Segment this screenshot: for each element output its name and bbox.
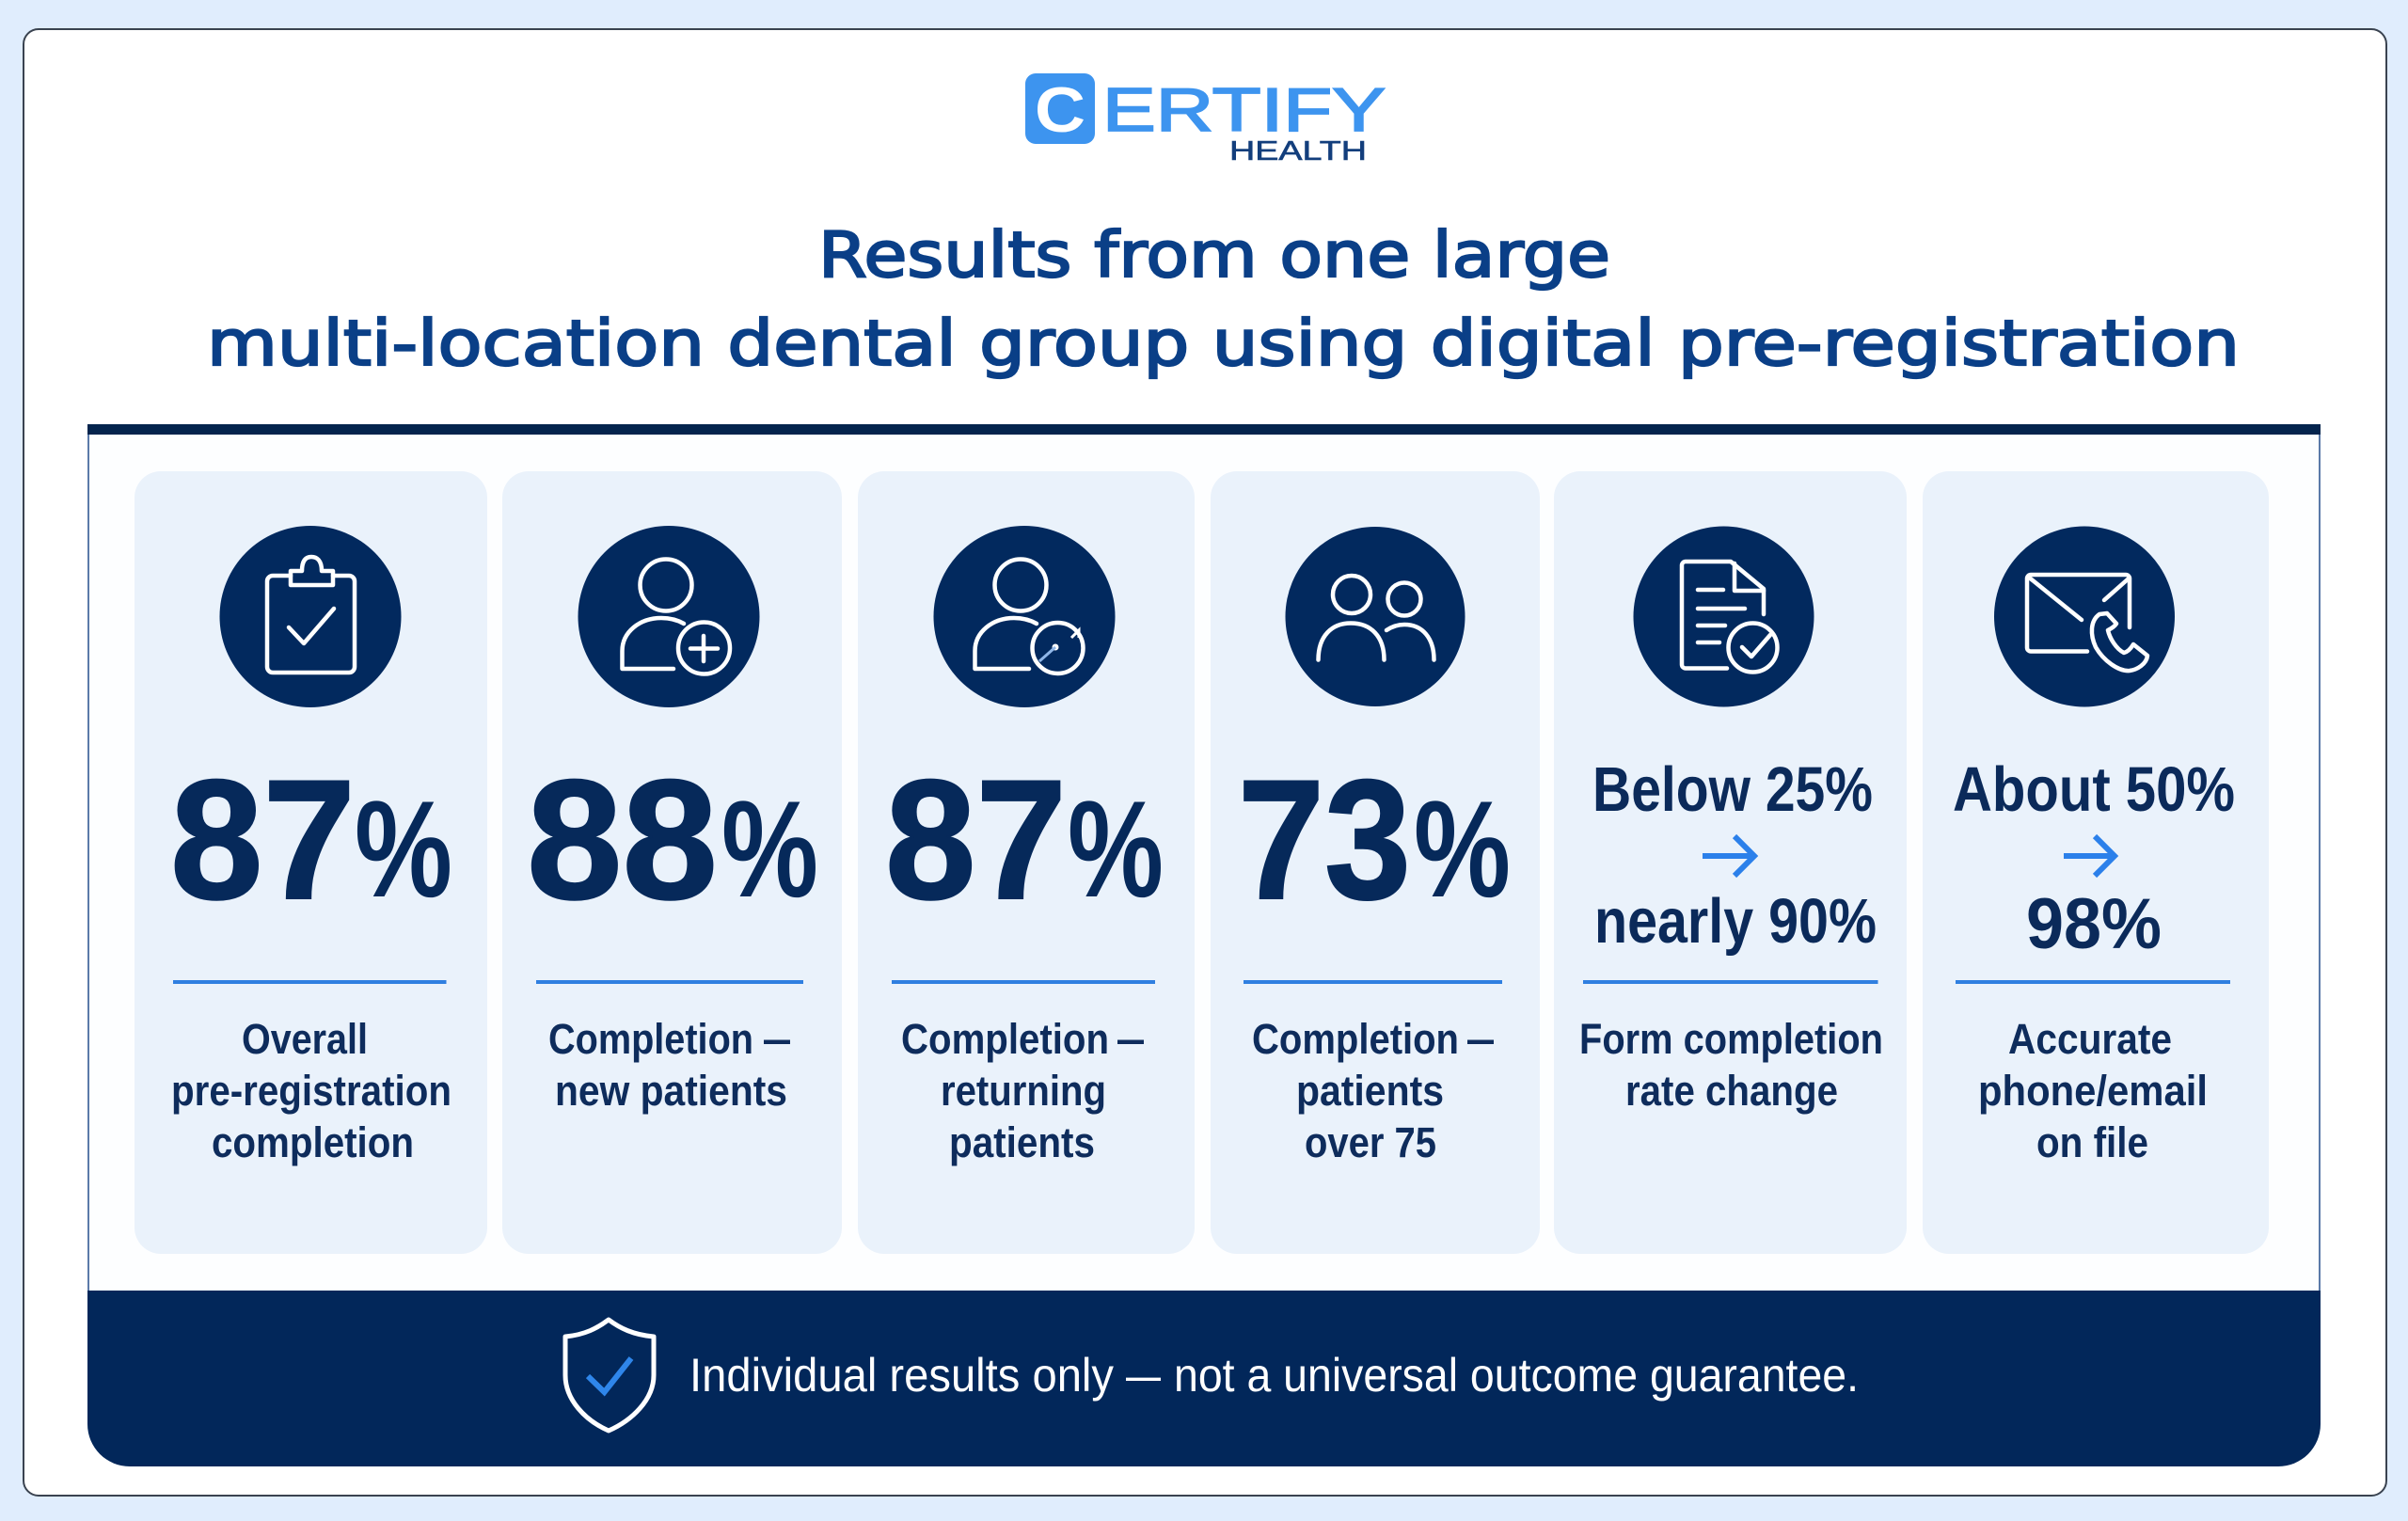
label	[548, 1015, 790, 1115]
icon: clipboard with check	[220, 526, 401, 707]
label: Form completion	[1579, 1015, 1883, 1063]
label: patients	[1296, 1067, 1444, 1115]
panel: form completion rate change	[1554, 471, 1907, 1254]
label: Overall	[242, 1015, 368, 1063]
big number 87%: %	[355, 772, 452, 926]
big number 87%: 87	[170, 745, 356, 935]
label: completion	[212, 1118, 414, 1166]
big number 88%: %	[721, 772, 818, 926]
logo: Certify Health	[1025, 73, 1386, 166]
disclaimer banner	[87, 1291, 2321, 1466]
stat: about 50% to 98%	[1953, 754, 2235, 964]
label: on file	[2036, 1118, 2148, 1166]
label	[171, 1015, 452, 1166]
results panel frame	[87, 424, 2321, 1293]
stat: about 50% to 98%: About 50%	[1953, 754, 2235, 825]
big number 73%: 73	[1238, 745, 1411, 935]
label: rate change	[1625, 1067, 1838, 1115]
icon: person with clock	[933, 526, 1116, 707]
big number 88%: 88	[527, 745, 718, 935]
panel: completion patients over 75	[1211, 471, 1540, 1254]
stat: below 25% to nearly 90%	[1592, 754, 1877, 957]
panel: completion new patients	[502, 471, 842, 1254]
label: Completion	[1252, 1015, 1459, 1063]
label: phone/email	[1978, 1067, 2208, 1115]
arrow	[2064, 836, 2115, 876]
disclaimer text: —	[1126, 1349, 1161, 1402]
big number 87%: 87	[885, 745, 1067, 935]
stat: below 25% to nearly 90%: Below 25%	[1592, 754, 1873, 825]
icon: two people	[1285, 527, 1465, 706]
label: returning	[941, 1067, 1106, 1115]
big number 87%: %	[1068, 772, 1164, 926]
disclaimer text	[689, 1349, 1859, 1402]
label: —	[1117, 1015, 1144, 1063]
label: new patients	[555, 1067, 787, 1115]
panel: overall pre-registration completion	[135, 471, 487, 1254]
label: —	[764, 1015, 790, 1063]
label: patients	[949, 1118, 1095, 1166]
icon: shield with check	[565, 1320, 654, 1431]
title	[207, 218, 2240, 380]
big number 73%: %	[1414, 772, 1511, 926]
big number 88%	[527, 745, 818, 935]
title: Results from one large	[818, 218, 1610, 292]
label: —	[1467, 1015, 1494, 1063]
panel: completion returning patients	[858, 471, 1195, 1254]
label: Accurate	[2008, 1015, 2172, 1063]
label: over 75	[1305, 1118, 1436, 1166]
label	[901, 1015, 1144, 1166]
big number 73%	[1238, 745, 1511, 935]
stat: below 25% to nearly 90%: nearly 90%	[1594, 886, 1877, 957]
icon: envelope with phone	[1994, 527, 2175, 707]
disclaimer text: not a universal outcome guarantee.	[1174, 1349, 1859, 1402]
logo: Certify Health: ERTIFY	[1102, 75, 1386, 144]
logo: Certify Health: HEALTH	[1229, 136, 1367, 166]
label	[1978, 1015, 2208, 1166]
stat: about 50% to 98%: 98%	[2026, 884, 2162, 964]
big number 87%	[885, 745, 1164, 935]
label	[1252, 1015, 1494, 1166]
panel: accurate phone and email on file	[1923, 471, 2269, 1254]
label: Completion	[901, 1015, 1109, 1063]
logo: Certify Health: C	[1035, 74, 1085, 146]
icon: document with check	[1633, 527, 1814, 707]
icon: person with plus	[578, 526, 760, 707]
label: pre-registration	[171, 1067, 452, 1115]
title: multi-location dental group using digital pre-registration	[207, 307, 2240, 380]
label	[1579, 1015, 1883, 1115]
arrow	[1703, 836, 1754, 876]
label: Completion	[548, 1015, 753, 1063]
big number 87%	[170, 745, 452, 935]
disclaimer text: Individual results only	[689, 1349, 1114, 1402]
